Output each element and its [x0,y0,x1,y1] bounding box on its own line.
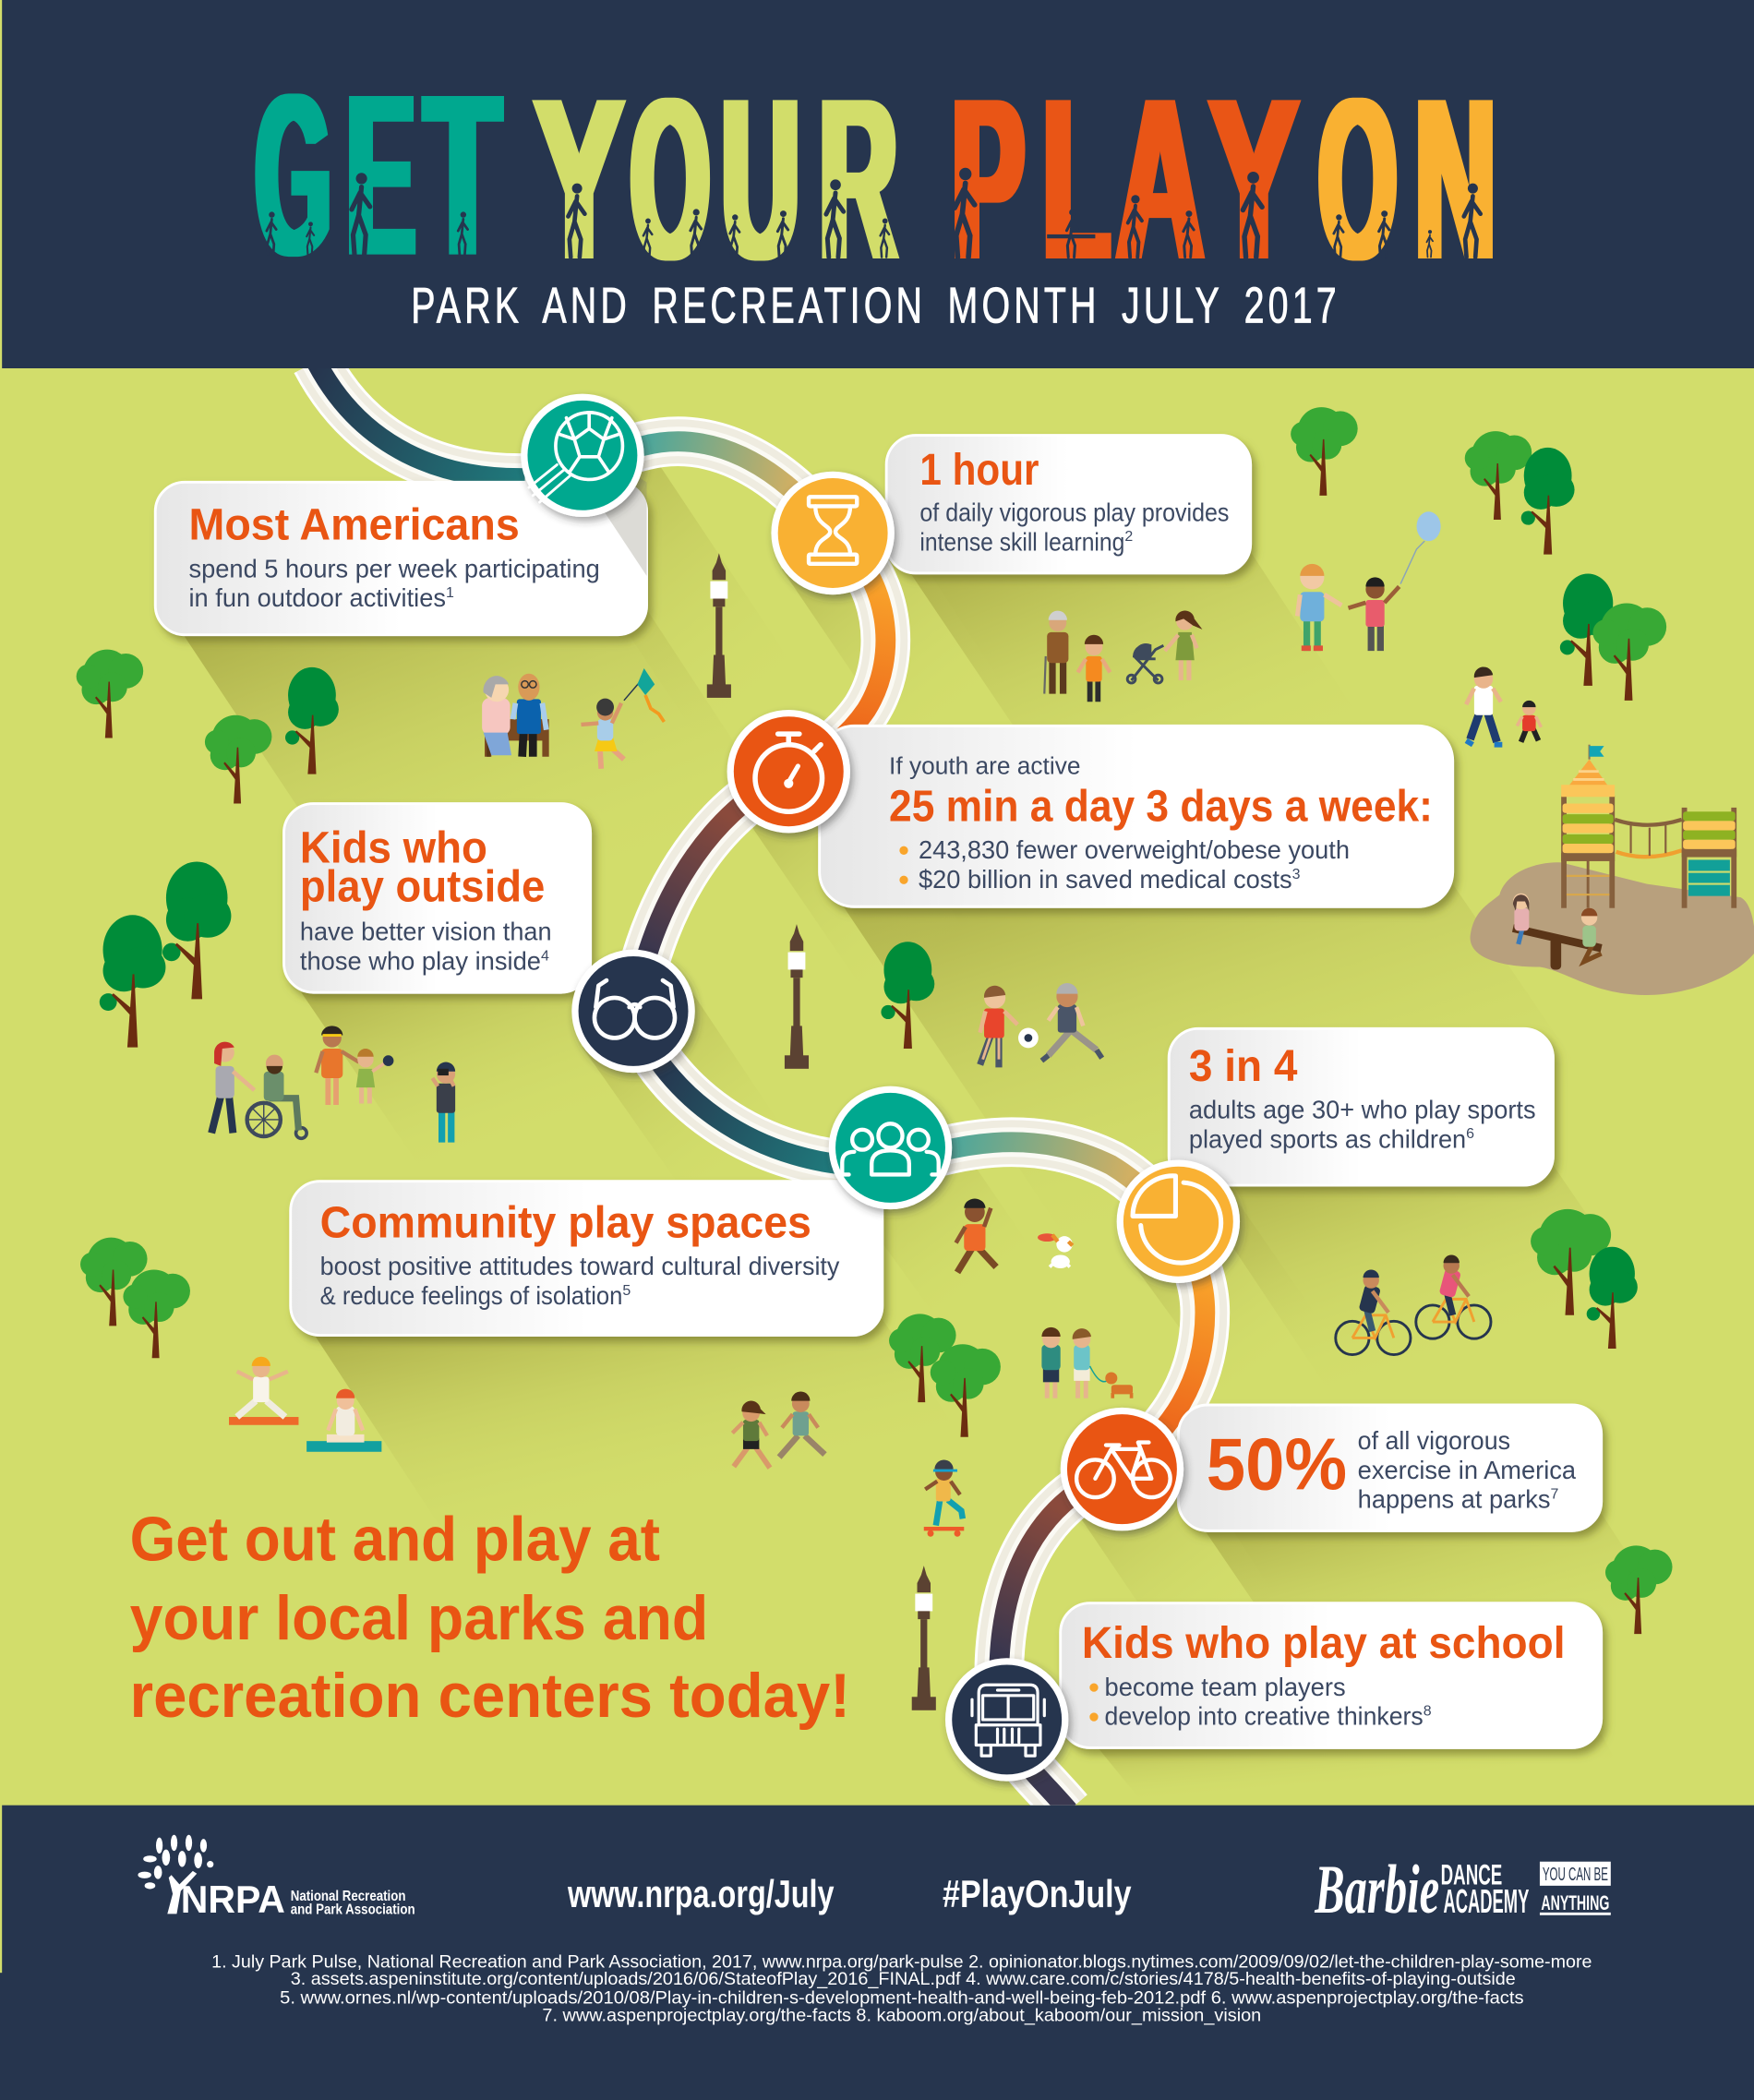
title word YOUR [535,50,897,307]
body text: in fun outdoor activities [189,583,446,612]
icon: school bus [945,1658,1068,1782]
heading [300,823,545,911]
heading: Kids who [300,823,487,872]
body text: played sports as children [1189,1124,1466,1153]
wordmark: NRPA [181,1878,285,1921]
body text: those who play inside [300,946,541,975]
footnotes: 7. www.aspenprojectplay.org/the-facts 8. kaboom.org/about_kaboom/our_mission_vision [542,2005,1261,2025]
icon: pie chart [1117,1159,1240,1283]
body text [300,918,552,975]
title word PLAY: L [1043,50,1110,307]
title word PLAY: Y [1209,50,1299,307]
title word YOUR: U [722,50,799,307]
tagline: National Recreation [291,1889,405,1904]
hashtag: #PlayOnJuly [943,1872,1132,1915]
people: soccer players [980,983,1102,1067]
bullet list [899,835,1350,894]
title word PLAY: A [1117,50,1204,307]
body text [1358,1426,1577,1514]
website: www.nrpa.org/July [567,1872,835,1915]
title: GET YOUR PLAY ON: R [820,50,897,307]
heading: 1 hour [919,446,1039,495]
title word GET: G [256,46,330,304]
icon: soccer ball [521,394,644,517]
body text: boost positive attitudes toward cultural diversity [320,1252,840,1280]
footnotes [211,1951,1592,2025]
people: kids with balloon [1297,511,1441,651]
title word YOUR: Y [535,50,624,307]
title word PLAY: P [952,50,1025,307]
trees [77,407,1673,1634]
left edge strip [0,0,2,1973]
seesaw with kids [1513,894,1602,969]
header band [0,0,1754,368]
subtitle: PARK AND RECREATION MONTH JULY 2017 [411,277,1340,334]
logo: Barbie Dance Academy [1315,1852,1611,1928]
body text: spend 5 hours per week participating [189,554,600,582]
people: couple walking dog [1041,1327,1133,1398]
people: family with stroller [1044,611,1202,702]
logo: Barbie Dance Academy: YOU CAN BE [1543,1865,1608,1885]
card: Kids who play at school [1061,1603,1602,1747]
body text: & reduce feelings of isolation [320,1281,622,1310]
call to action [130,1504,850,1731]
card: 25 min a day [820,726,1453,906]
bullet list: develop into creative thinkers [1105,1702,1424,1731]
intro text: If youth are active [889,752,1080,780]
body text: have better vision than [300,918,552,946]
lampposts [707,553,936,1710]
tagline: and Park Association [291,1902,415,1917]
people: runners [1466,666,1541,745]
heading: 25 min a day 3 days a week: [889,782,1433,831]
title: GET YOUR PLAY ON [256,46,1496,307]
dirt patch [1471,862,1754,995]
park ground [0,368,1754,1806]
people silhouettes in title letters [267,168,1481,258]
rope bridge [1615,820,1682,857]
right tower [1682,808,1736,908]
body text: happens at parks [1358,1485,1551,1514]
logo: Barbie Dance Academy: ANYTHING [1541,1891,1609,1914]
body text [1189,1095,1536,1153]
bullet list: 3 [1292,867,1301,882]
call to action: Get out and play at [130,1504,660,1574]
people: yoga on mats [229,1357,381,1452]
call to action: your local parks and [130,1583,708,1653]
winding path [316,362,1205,1811]
footnotes: 5. www.ornes.nl/wp-content/uploads/2010/08/Play-in-children-s-development-health-and-well-being-feb-2012.pdf 6. www.aspenprojectplay.org/the-facts [280,1988,1524,2009]
heading: Most Americans [189,501,520,550]
bullet list: 243,830 fewer overweight/obese youth [919,835,1350,864]
icon: stopwatch [727,710,850,833]
card: 3 in 4 [1169,1028,1553,1185]
people: seniors on bench [482,674,549,757]
title word GET: T [425,46,500,304]
body text: 6 [1466,1126,1474,1142]
title word GET: E [347,46,415,304]
people: joggers [732,1391,824,1468]
call to action: recreation centers today! [130,1661,850,1731]
text: N [1415,50,1496,307]
title word YOUR: O [631,50,710,307]
people: cyclists [1336,1254,1491,1355]
icon: bicycle [1061,1408,1183,1530]
body text [189,554,600,612]
heading: play outside [300,862,545,911]
body text: 5 [622,1283,631,1299]
bullet list [1089,1673,1432,1731]
logo: NRPA [138,1835,415,1921]
card: 50% [1178,1405,1602,1530]
logo: Barbie Dance Academy: ACADEMY [1444,1882,1529,1920]
footnotes: 1. July Park Pulse, National Recreation and Park Association, 2017, www.nrpa.org/park-pulse 2. opinionator.blogs.nytimes.com/2009/09/02/let-the-children-play-some-more [211,1951,1592,1972]
icon: glasses [571,950,695,1073]
body text: exercise in America [1358,1456,1577,1484]
footnotes: 3. assets.aspeninstitute.org/content/uploads/2016/06/StateofPlay_2016_FINAL.pdf 4. www.care.com/c/stories/4178/5-health-benefits-of-playing-outside [291,1969,1516,1989]
playground [1471,745,1754,995]
heading: 3 in 4 [1189,1042,1298,1091]
card: Community play spaces [291,1182,883,1336]
body text: intense skill learning [919,527,1124,556]
tagline [291,1889,415,1917]
heading: Community play spaces [320,1199,811,1248]
title word PLAY [952,50,1299,307]
body text: 1 [446,585,454,601]
long shadows [184,426,1740,1806]
body text: 2 [1124,529,1133,545]
bullet list: 8 [1424,1704,1432,1720]
logo: Barbie Dance Academy: Barbie [1315,1852,1439,1928]
heading: Kids who play at school [1082,1619,1565,1668]
left tower [1561,745,1615,908]
body text [320,1252,840,1310]
bullet list: $20 billion in saved medical costs [919,865,1292,894]
logo: Barbie Dance Academy: DANCE [1441,1857,1502,1890]
icon: hourglass [771,472,895,594]
icon: tree [138,1835,213,1914]
people: girl with kite [581,668,664,769]
body text: 7 [1551,1487,1559,1503]
body text: 4 [541,948,549,964]
card: Kids who play outside [283,804,591,992]
card: Most Americans [155,455,647,635]
bullet list: become team players [1105,1673,1346,1701]
icon: community [829,1086,952,1209]
body text: adults age 30+ who play sports [1189,1095,1536,1123]
people: man and dog with frisbee [956,1199,1073,1272]
path segment colours [316,362,1205,1811]
people: skateboarder [924,1459,964,1537]
footer band [0,1806,1754,2100]
big stat: 50% [1207,1422,1347,1505]
title word ON: O [1319,50,1397,307]
people: wheelchair group [211,1026,455,1143]
body text: of all vigorous [1358,1426,1510,1455]
body text: of daily vigorous play provides [919,498,1229,526]
card: 1 hour [886,436,1251,573]
body text [919,498,1229,556]
